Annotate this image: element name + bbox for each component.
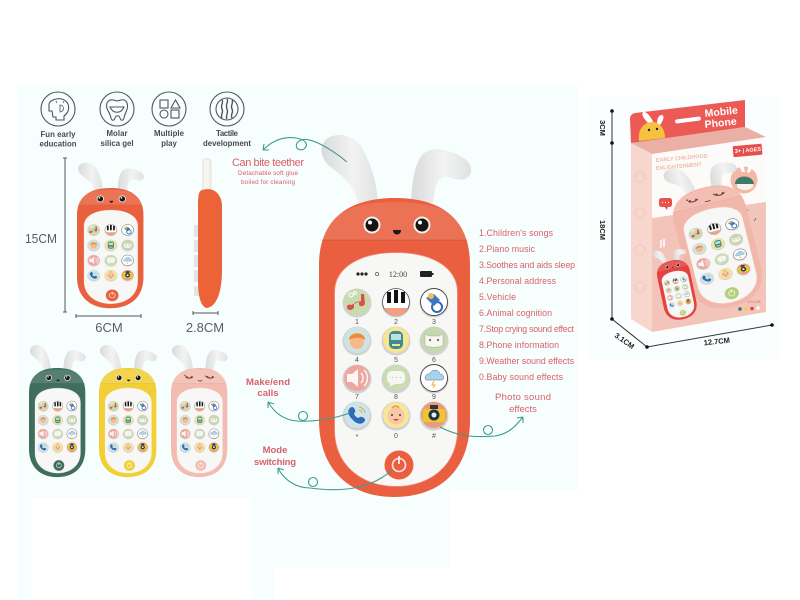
dimension: 15CM height: 15CM <box>25 231 57 246</box>
dimension: 6CM width: 6CM <box>95 320 123 335</box>
label: fun early education: education <box>40 140 77 148</box>
list: sound functions: 0.Baby sound effects <box>479 372 564 382</box>
callout: can bite teether: boiled for cleaning <box>241 179 295 186</box>
label: molar silica gel: silica gel <box>100 139 134 148</box>
box hanger tab: Phone <box>704 116 737 131</box>
arrow: mode switching <box>278 468 392 490</box>
phone: main large orange: 12:00 <box>389 270 407 279</box>
box side panel <box>631 143 652 332</box>
box front panel: 3+ | AGES <box>735 147 762 155</box>
panel: product box <box>630 100 769 332</box>
phone: main large orange: 2 <box>394 319 398 326</box>
callout: can bite teether: Can bite teether <box>232 157 304 169</box>
list: sound functions: 9.Weather sound effects <box>479 356 575 366</box>
phone: main large orange: 6 <box>432 357 436 364</box>
phone: main large orange <box>319 135 471 497</box>
phone: main large orange: # <box>432 433 436 440</box>
phone: main large orange: 4 <box>355 357 359 364</box>
callout: can bite teether <box>232 157 304 186</box>
box hanger tab: Mobile <box>704 105 739 120</box>
list: sound functions: 2.Piano music <box>479 244 536 254</box>
phone: green <box>29 345 86 477</box>
phone: orange front view <box>77 163 144 308</box>
icon: tactile development <box>210 92 244 126</box>
panel: color variants <box>29 345 228 477</box>
box dimensions: 12.7CM <box>703 336 730 347</box>
icon: molar silica gel <box>100 92 134 126</box>
phone: orange side view: 2.8CM <box>186 320 224 335</box>
label: multiple play: Multiple <box>154 129 185 138</box>
dimension: 6CM width <box>76 314 141 335</box>
label: fun early education: Fun early <box>40 130 76 139</box>
box dimensions <box>598 109 774 351</box>
phone: main large orange: 3 <box>432 319 436 326</box>
list: sound functions: 5.Vehicle <box>479 292 516 302</box>
label: make/end calls: calls <box>257 388 279 399</box>
list: sound functions: 1.Children's songs <box>479 228 554 238</box>
phone: main large orange: 5 <box>394 357 398 364</box>
arrow: teether <box>263 138 347 162</box>
box top strip <box>631 127 766 154</box>
phone: main large orange: 7 <box>355 394 359 401</box>
label: make/end calls: Make/end <box>246 377 290 388</box>
arrow: photo sound effects <box>440 417 523 437</box>
label: tactile development: development <box>203 139 251 148</box>
list: sound functions: 6.Animal cognition <box>479 308 552 318</box>
box front panel: EARLY CHILDHOOD <box>656 153 708 164</box>
phone: orange side view <box>186 158 224 335</box>
list: sound functions: 4.Personal address <box>479 276 557 286</box>
phone: yellow <box>99 345 157 477</box>
list: sound functions: 3.Soothes and aids sleep <box>479 260 575 270</box>
box: small red phone image <box>652 245 700 323</box>
label: photo sound effects: effects <box>509 404 537 415</box>
icon: fun early education <box>41 92 75 126</box>
label: tactile development: Tactile <box>216 129 239 138</box>
box dimensions: 18CM <box>598 220 607 240</box>
phone: pink <box>171 345 228 477</box>
arrow: make/end calls <box>268 402 350 421</box>
phone: main large orange: 9 <box>432 394 436 401</box>
callout: can bite teether: Detachable soft glue <box>238 170 298 177</box>
list: sound functions <box>479 228 575 382</box>
label: photo sound effects: Photo sound <box>495 392 551 403</box>
panel: feature icons <box>40 92 251 148</box>
box: pink phone image <box>661 153 769 315</box>
label: mode switching: Mode <box>263 445 287 456</box>
icon: multiple play <box>152 92 186 126</box>
box hanger tab <box>630 100 745 143</box>
box front panel <box>652 137 766 332</box>
list: sound functions: 8.Phone information <box>479 340 559 350</box>
label: multiple play: play <box>161 139 177 148</box>
phone: main large orange: 0 <box>394 433 398 440</box>
box front panel: COLOR <box>747 300 761 304</box>
label: molar silica gel: Molar <box>106 129 128 138</box>
phone: main large orange: 1 <box>355 319 359 326</box>
list: sound functions: 7.Stop crying sound effect <box>479 324 575 334</box>
phone: main large orange: * <box>356 434 359 441</box>
box dimensions: 3.1CM <box>613 331 636 351</box>
phone: main large orange: 8 <box>394 394 398 401</box>
dimension: 15CM height <box>25 158 67 312</box>
label: mode switching: switching <box>254 457 296 468</box>
box front panel: ENLIGHTENMENT <box>656 162 703 172</box>
box dimensions: 3CM <box>598 120 607 136</box>
